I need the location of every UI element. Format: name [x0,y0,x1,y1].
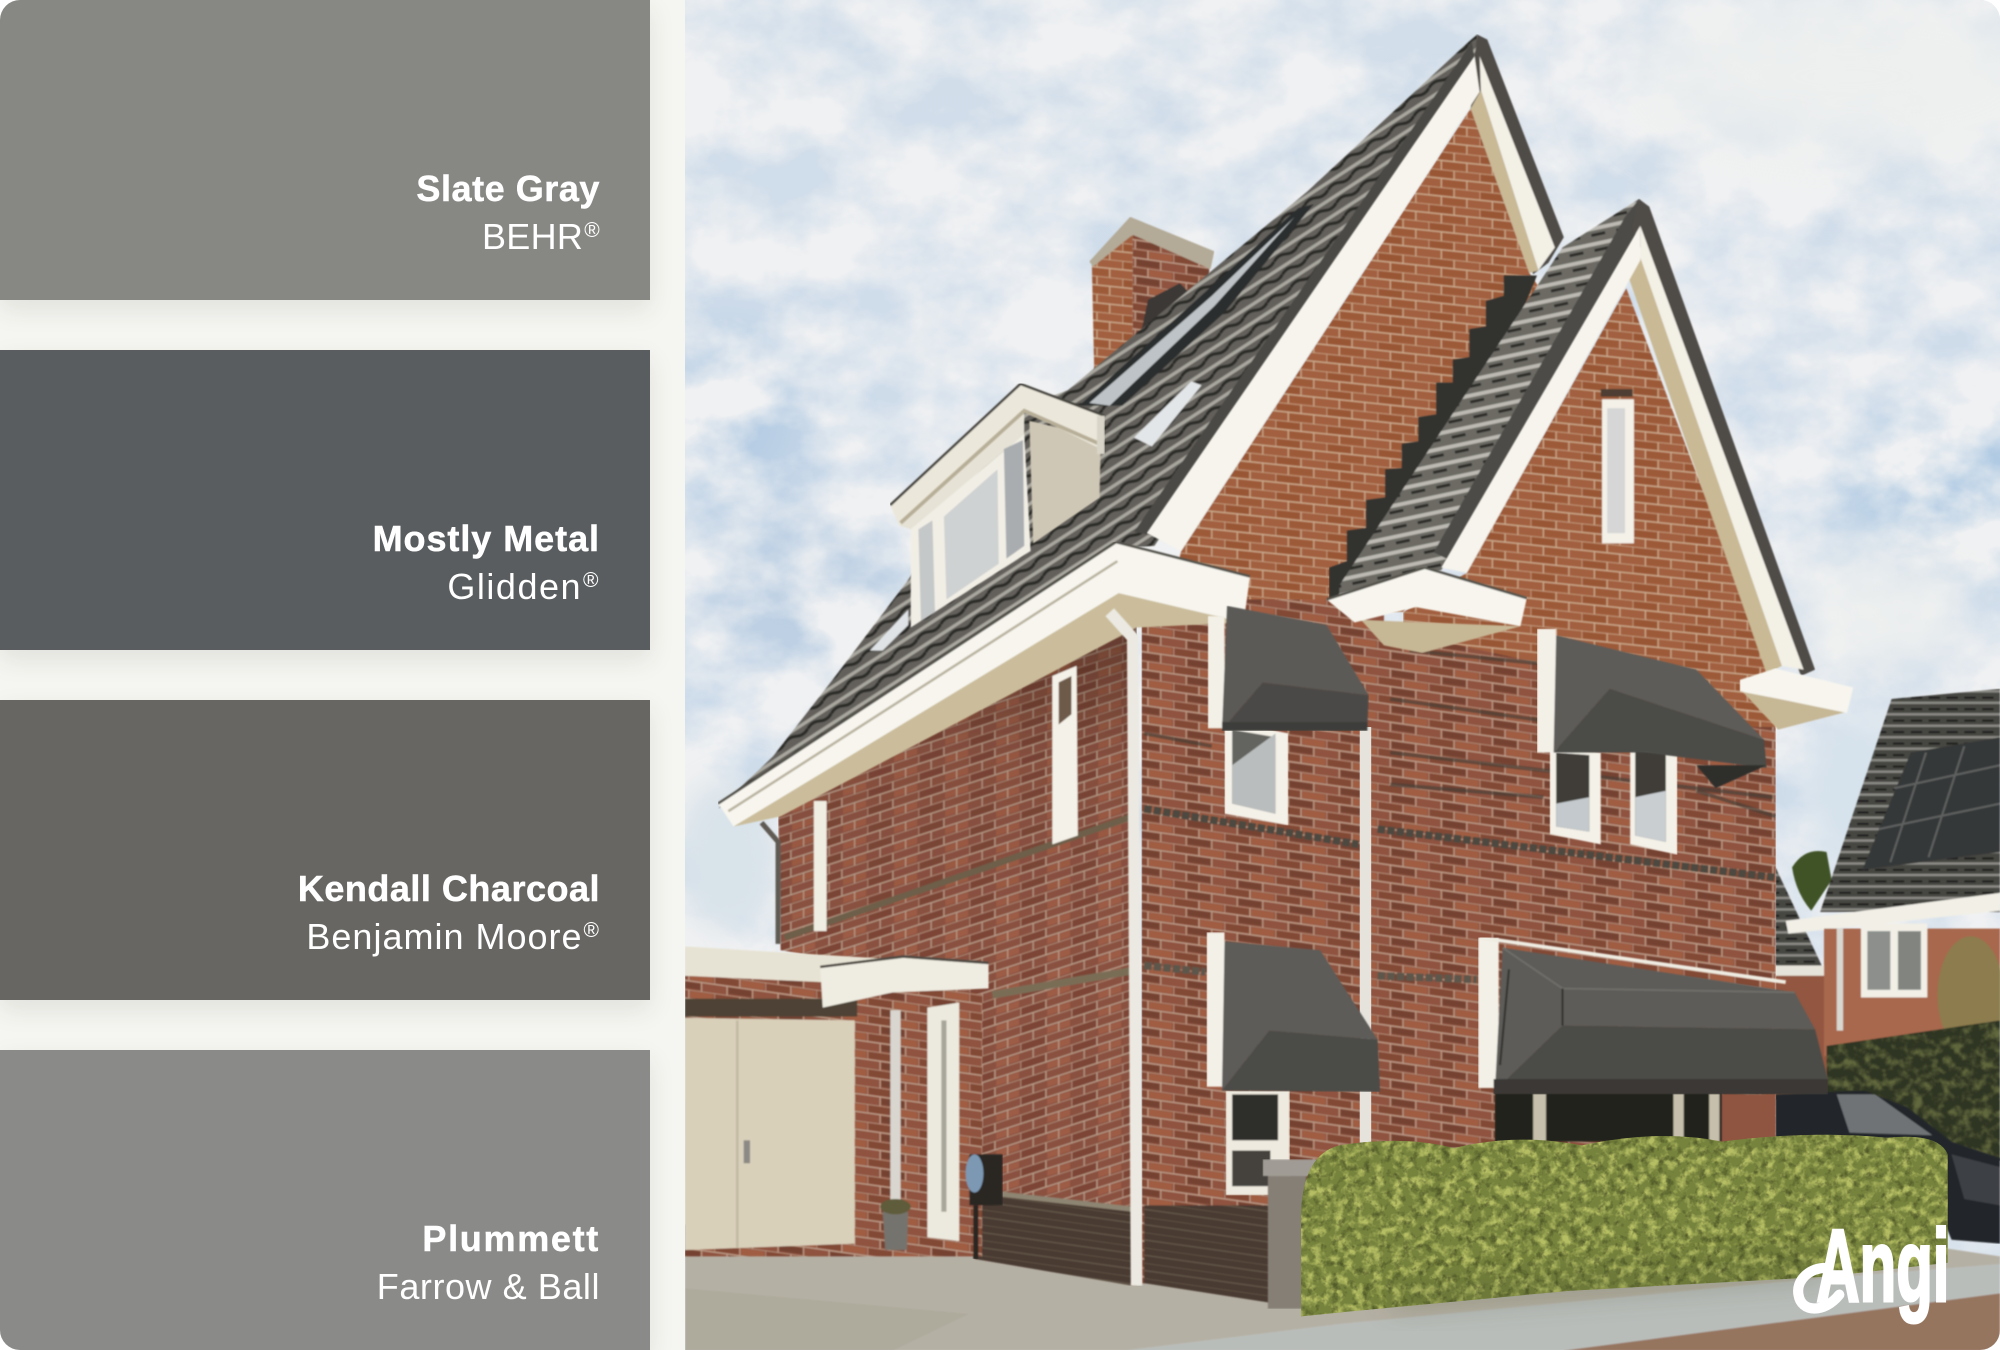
awning: lower large [1478,938,1828,1094]
Angi logo [1798,1208,1949,1323]
left brick wall [778,606,1137,1286]
hedge [1301,1135,1948,1316]
main roof [718,34,1482,809]
photo: brick house with gray roof and awnings [685,0,2000,1350]
swatch: Slate Gray [0,0,650,300]
gable one right edge [1471,34,1564,274]
neighbouring house [1776,689,2000,1161]
left wall windows [1052,666,1078,844]
garage with roof and door [685,946,1003,1259]
roof two with stepped shadow [1329,199,1645,599]
swatch name: Slate Gray: Slate Gray [416,168,600,208]
dark brick plinth [1144,1205,1276,1304]
swatch: Kendall Charcoal [0,700,650,1000]
swatch name: Kendall Charcoal: Kendall Charcoal [298,868,600,908]
upper window under small awning [1225,721,1288,825]
entry door [927,1003,959,1241]
awning: lower small [1207,932,1380,1092]
main eave and soffit [718,542,1250,1286]
logo wordmark: Angi [1816,1208,1949,1323]
eave box three [1740,668,1853,730]
eave box two [1327,568,1527,653]
swatch: Mostly Metal [0,350,650,650]
swatch name: Mostly Metal: Mostly Metal [373,518,600,558]
gable one [1147,34,1569,612]
ridge band [1134,42,1475,536]
service pipe [890,1010,901,1202]
gable two brick [1403,288,1776,893]
swatch brand: BEHR: BEHR® [482,216,600,257]
awning: upper large [1537,629,1767,788]
porch canopy [820,957,989,1008]
gable window [1602,399,1634,543]
gable one white bargeboard [1147,56,1480,551]
garage door [685,1018,855,1250]
downpipe [1110,612,1137,1286]
ground: driveway, sidewalk and paving [685,1224,2000,1350]
roof skylight panels [1079,204,1314,406]
swatch brand: Glidden: Glidden® [447,566,600,607]
front brick walls [1142,599,1776,1304]
parked car [1776,1091,2000,1244]
drainpipe centre [1360,727,1371,1148]
chimney [1089,217,1214,379]
garage brick [685,976,982,1256]
meter box [969,1154,1003,1205]
string courses [1144,809,1776,878]
swatch name: Plummett: Plummett [422,1218,600,1258]
dormer [890,384,1105,628]
swatch brand: Farrow and Ball: Farrow & Ball [377,1266,600,1307]
gable one brick [1167,108,1569,612]
small tree [1792,851,1832,911]
plant pot [883,1212,908,1250]
stone gate pillar [1263,1159,1319,1309]
upper windows under large awning [1550,746,1677,855]
swatch: Plummett [0,1050,650,1350]
gable two right edge [1633,199,1815,676]
lower small window [1226,1091,1290,1195]
logo swoosh [1798,1268,1839,1309]
gable two white bargeboard [1441,226,1640,573]
lower wide window band [1495,1091,1776,1148]
sky [651,0,2000,1350]
garage roof band [685,946,918,982]
awning: upper small [1208,606,1369,731]
gable two [1403,199,1815,893]
swatch brand: Benjamin Moore: Benjamin Moore® [306,916,600,957]
